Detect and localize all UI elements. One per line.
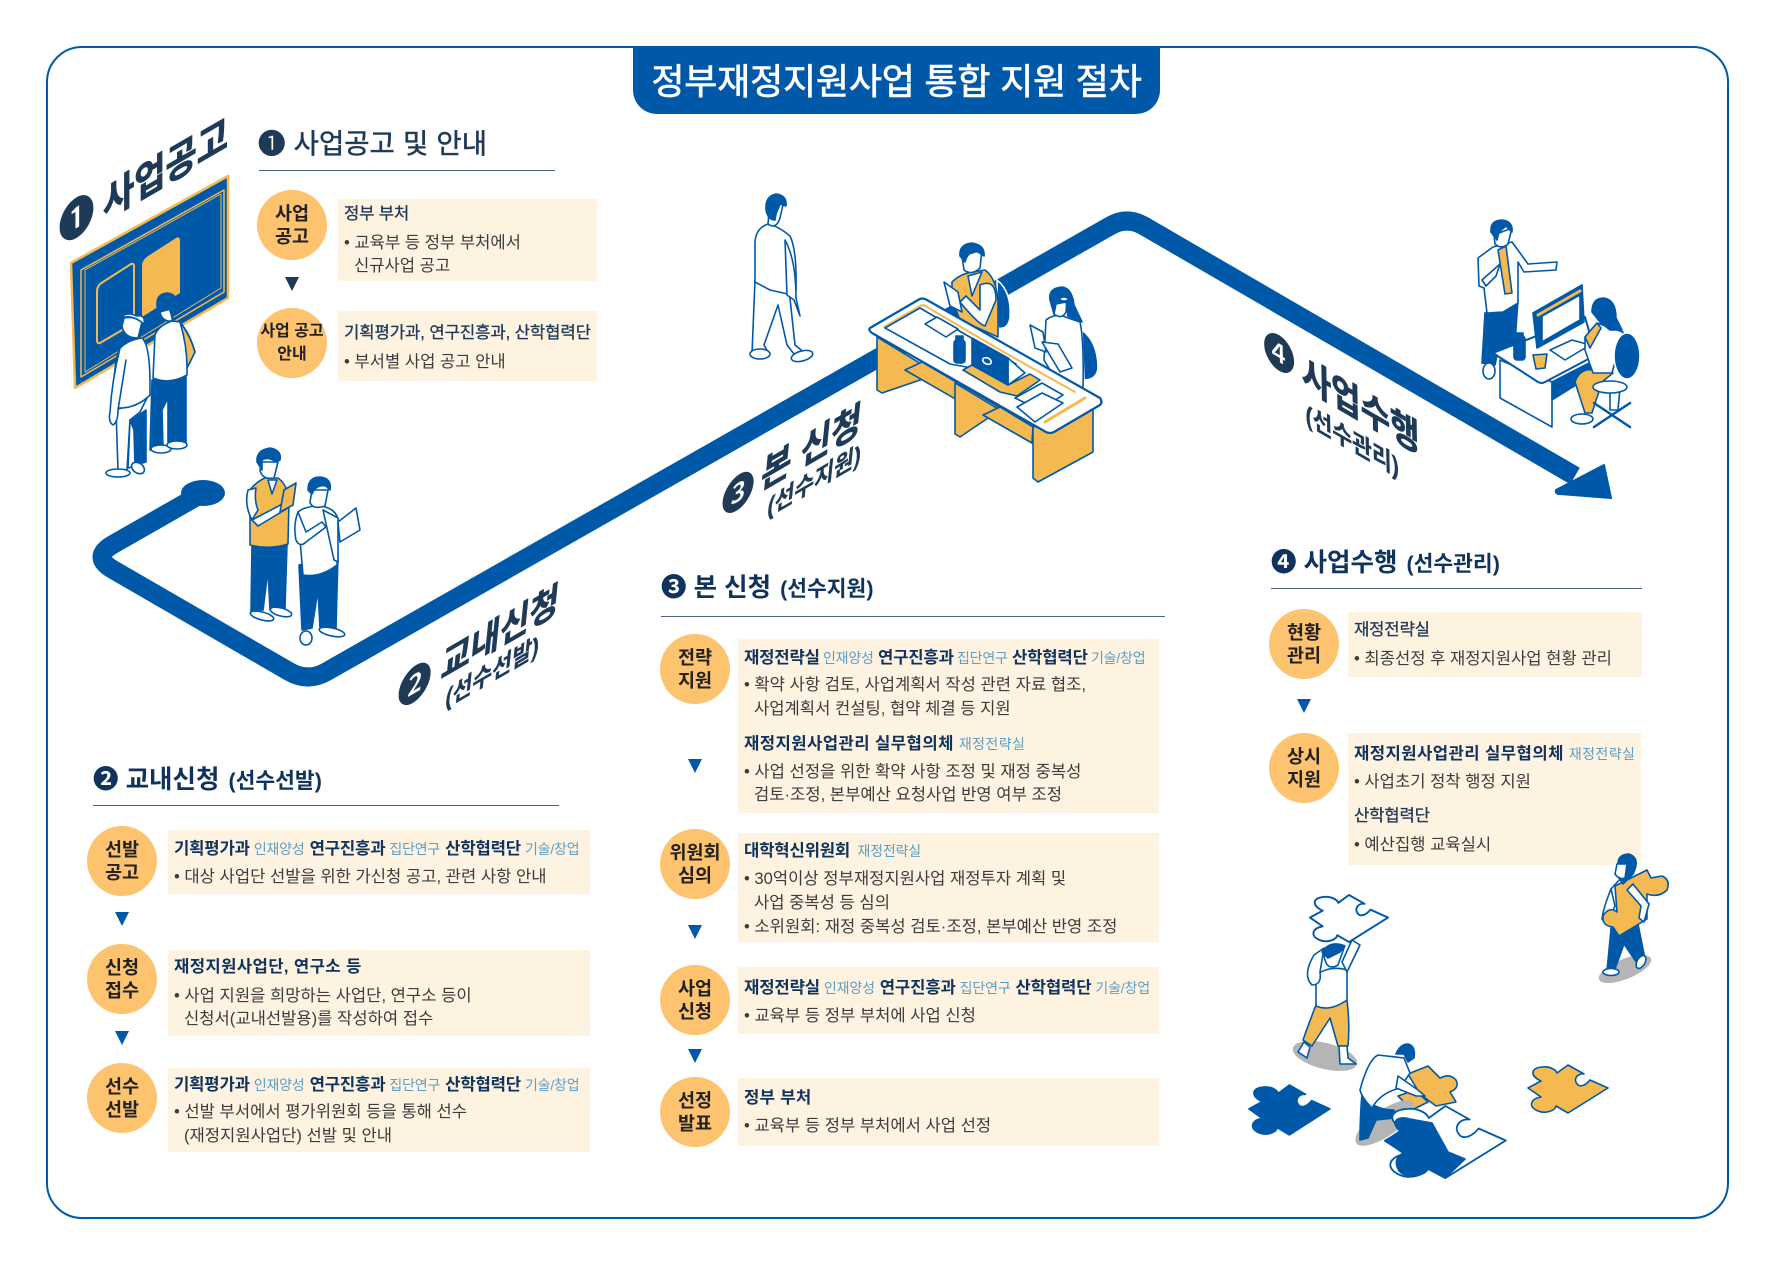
step badge: 전략 지원 [660,634,730,704]
step badge: 전략 지원: 지원 [678,670,712,691]
illustration: walking man [750,194,814,364]
step badge: 사업 신청: 신청 [678,1001,712,1022]
text box: 재정지원사업단, 연구소 등 [174,957,362,976]
step badge: 사업 공고 [257,190,327,260]
text box: 기획평가과 인재양성 연구진흥과 집단연구 산학협력단 기술/창업 [174,839,579,858]
section label: 2 교내신청: 교내신청 [439,578,561,689]
step badge: 사업 신청 [660,965,730,1035]
illustration: two people at the board [106,293,195,477]
step badge: 전략 지원: 전략 [678,647,712,668]
section label: 1 사업공고 [59,108,228,254]
text box: • 예산집행 교육실시 [1354,835,1491,854]
illustration: woman carrying puzzle piece [1595,854,1668,989]
text box [168,1068,590,1152]
illustration: office desk with manager and worker [1478,220,1640,427]
icon: blue puzzle piece [1249,1085,1330,1135]
section label: 3 본 신청 [717,396,867,551]
step badge: 신청 접수: 신청 [105,957,139,978]
section label: 4 사업수행: (선수관리) [1305,400,1399,483]
illustration: man lifting puzzle piece [1290,895,1388,1077]
heading: 사업공고 및 안내: ❶ 사업공고 및 안내 [258,128,487,159]
text box: • 교육부 등 정부 부처에 사업 신청 [744,1006,976,1025]
step badge: 선수 선발: 선수 [105,1076,139,1097]
step badge: 위원회 심의: 심의 [678,865,712,886]
text box: 사업계획서 컨설팅, 협약 체결 등 지원 [754,699,1011,718]
text box [1348,612,1642,677]
text box: 기획평가과, 연구진흥과, 산학협력단: 기획평가과, 연구진흥과, 산학협력단 [344,323,591,342]
step badge: 현황 관리: 관리 [1287,645,1321,666]
step badge: 현황 관리 [1269,609,1339,679]
text box: • 교육부 등 정부 부처에서 사업 선정 [744,1116,991,1135]
step badge: 현황 관리: 현황 [1287,622,1321,643]
text box [738,639,1159,813]
step badge: 상시 지원: 지원 [1287,769,1321,790]
arrow [688,759,702,773]
step badge: 선발 공고: 공고 [105,862,139,883]
text box [1348,733,1641,865]
text box: 정부 부처 [744,1088,812,1107]
text box: • 최종선정 후 재정지원사업 현황 관리 [1354,649,1612,668]
panel: 1 사업공고 및 안내 [257,128,597,381]
text box: • 확약 사항 검토, 사업계획서 작성 관련 자료 협조, [744,675,1086,694]
arrow [115,1031,129,1045]
step badge: 사업 신청: 사업 [678,978,712,999]
arrow [1297,699,1311,713]
text box: 정부 부처: 정부 부처 [344,204,409,223]
step badge: 상시 지원 [1269,733,1339,803]
text box: 검토·조정, 본부예산 요청사업 반영 여부 조정 [754,785,1062,804]
text box: • 선발 부서에서 평가위원회 등을 통해 선수 [174,1102,467,1121]
text box: 기획평가과, 연구진흥과, 산학협력단 [338,311,597,381]
illustration: crouching man with puzzle pieces [1349,1044,1457,1154]
heading: 본 신청 (선수지원): ❸ 본 신청 (선수지원) [661,574,874,602]
text box: • 사업 지원을 희망하는 사업단, 연구소 등이 [174,986,472,1005]
text box: 사업 중복성 등 심의 [754,893,890,912]
section label: 2 교내신청: ❷ [396,655,433,718]
section label: 1 사업공고: ❶ [59,186,94,253]
text box: 재정지원사업관리 실무협의체 재정전략실 [1354,744,1635,763]
section label: 4 사업수행: 사업수행 [1301,350,1420,461]
step badge: 선정 발표: 발표 [678,1113,712,1134]
step badge: 선정 발표: 선정 [678,1090,712,1111]
section label: 2 교내신청 [393,578,561,743]
text box: 재정전략실 인재양성 연구진흥과 집단연구 산학협력단 기술/창업 [744,978,1150,997]
step badge: 위원회 심의 [660,829,730,899]
text box [738,833,1159,942]
title banner [633,46,1160,114]
text box: 재정전략실 [1354,620,1430,639]
panel: 4 사업수행 [1269,549,1642,865]
icon: orange puzzle piece [1528,1065,1608,1113]
step badge: 사업 공고: 사업 [275,203,309,224]
step badge: 사업 공고: 공고 [275,226,309,247]
step badge: 사업 공고 안내 [257,308,327,378]
text box: 정부 부처: • 교육부 등 정부 부처에서 [344,233,521,252]
step badge: 사업 공고 안내: 사업 공고 [260,323,324,340]
icon: notice board [71,176,228,388]
step badge: 선수 선발 [87,1063,157,1133]
section label: 3 본 신청: 본 신청 [759,397,864,499]
text box: • 사업초기 정착 행정 지원 [1354,772,1531,791]
arrow [688,925,702,939]
text box: (재정지원사업단) 선발 및 안내 [184,1126,392,1145]
text box: • 소위원회: 재정 중복성 검토·조정, 본부예산 반영 조정 [744,917,1117,936]
step badge: 선발 공고: 선발 [105,839,139,860]
illustration: two staff with tablets [247,448,360,645]
text box: • 대상 사업단 선발을 위한 가신청 공고, 관련 사항 안내 [174,867,547,886]
step badge: 위원회 심의: 위원회 [669,842,721,863]
section label: 3 본 신청: ❸ [720,464,756,525]
icon: half-finished puzzle piece [1385,1106,1506,1178]
text box: 재정지원사업관리 실무협의체 재정전략실 [744,734,1025,753]
illustration: front desk with two staff [869,243,1102,482]
step badge: 신청 접수 [87,944,157,1014]
text box: • 사업 선정을 위한 확약 사항 조정 및 재정 중복성 [744,762,1081,781]
text box: 재정전략실 인재양성 연구진흥과 집단연구 산학협력단 기술/창업 [744,648,1145,667]
text box [738,1078,1159,1146]
text box: 정부 부처 [338,199,597,281]
text box: 산학협력단 [1354,806,1430,825]
section label: 1 사업공고: 사업공고 [103,111,228,229]
panel: 3 본 신청 [660,574,1165,1147]
text box [738,967,1159,1034]
panel: 2 교내신청 [87,766,590,1152]
section label: 4 사업수행: ❹ [1263,325,1295,384]
heading: 사업수행 (선수관리): ❹ 사업수행 (선수관리) [1271,549,1500,577]
step badge: 사업 공고 안내: 안내 [277,346,307,363]
text box: 정부 부처: 신규사업 공고 [354,256,450,275]
arrow [688,1049,702,1063]
text box: 기획평가과 인재양성 연구진흥과 집단연구 산학협력단 기술/창업 [174,1075,579,1094]
arrow [115,912,129,926]
text box: 기획평가과, 연구진흥과, 산학협력단: • 부서별 사업 공고 안내 [344,352,506,371]
heading: 교내신청 (선수선발): ❷ 교내신청 (선수선발) [93,766,322,794]
arrow [285,277,299,291]
step badge: 선수 선발: 선발 [105,1099,139,1120]
road arrow [102,221,1611,677]
step badge: 선정 발표 [660,1077,730,1147]
title banner: 정부재정지원사업 통합 지원 절차 [651,61,1142,102]
step badge: 신청 접수: 접수 [105,980,139,1001]
section label: 2 교내신청: (선수선발) [444,631,540,714]
step badge: 상시 지원: 상시 [1287,746,1321,767]
text box: 대학혁신위원회 재정전략실 [744,841,921,860]
section label: 3 본 신청: (선수지원) [766,440,862,523]
text box [168,830,590,894]
section label: 4 사업수행 [1263,325,1420,495]
text box: 신청서(교내선발용)를 작성하여 접수 [184,1009,433,1028]
text box: • 30억이상 정부재정지원사업 재정투자 계획 및 [744,869,1066,888]
text box [168,950,590,1036]
step badge: 선발 공고 [87,826,157,896]
